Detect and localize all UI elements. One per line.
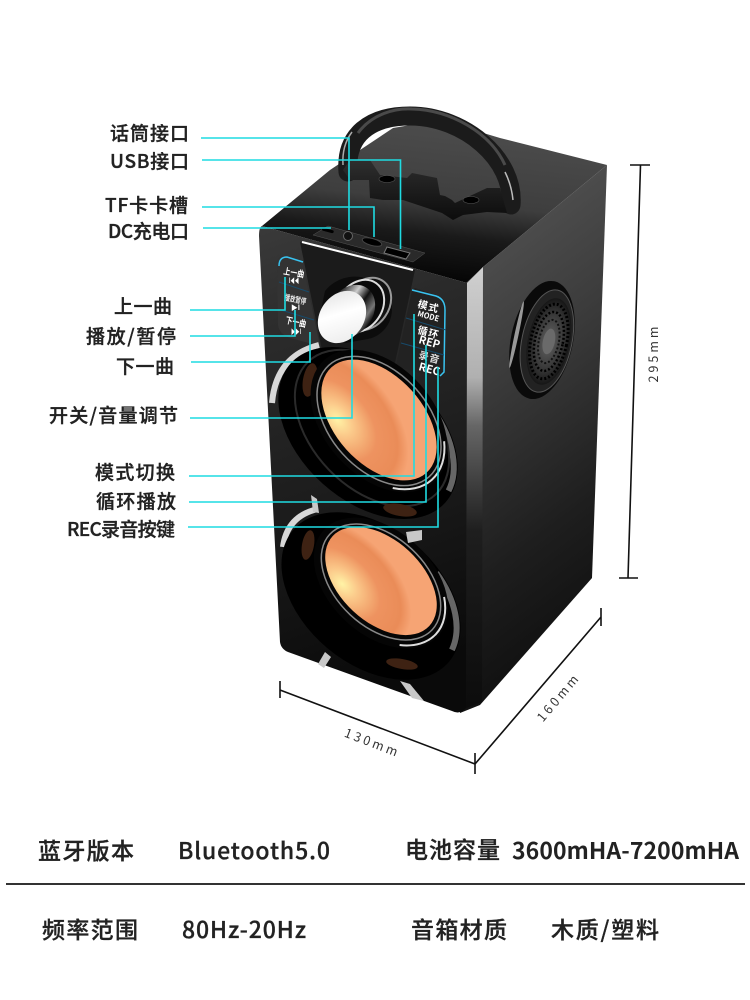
right button panel: REC bbox=[417, 358, 442, 379]
spec: 木质/塑料: 木质/塑料 bbox=[551, 911, 659, 945]
label: TF卡卡槽: TF卡卡槽 bbox=[105, 191, 188, 218]
label: 开关/音量调节: 开关/音量调节 bbox=[49, 401, 178, 428]
left button panel bbox=[277, 256, 320, 346]
spec: 80Hz-20Hz: 80Hz-20Hz bbox=[182, 911, 306, 945]
top face of speaker bbox=[262, 120, 607, 283]
front face bbox=[259, 226, 467, 712]
label: 上一曲: 上一曲 bbox=[114, 292, 172, 319]
right button panel bbox=[396, 288, 446, 379]
label: 话筒接口: 话筒接口 bbox=[110, 119, 189, 146]
side face bbox=[460, 165, 607, 713]
label: 播放/暂停: 播放/暂停 bbox=[86, 322, 176, 349]
centre knob panel bbox=[300, 242, 415, 372]
dimension: depth 160mm bbox=[475, 608, 601, 764]
handle mount bbox=[343, 160, 507, 220]
spec: 电池容量: 电池容量 bbox=[405, 831, 500, 865]
right button panel: 循环 bbox=[416, 321, 440, 341]
left button panel: ▶▶I bbox=[291, 327, 301, 337]
lower woofer bbox=[249, 478, 493, 714]
label: REC录音按键: REC录音按键 bbox=[67, 515, 175, 542]
callout lines bbox=[188, 138, 438, 527]
left button panel: I◀◀ bbox=[289, 276, 299, 286]
left button panel: 上一曲 bbox=[282, 264, 305, 281]
spec divider bbox=[6, 883, 745, 885]
dimension: height 295mm bbox=[619, 165, 662, 578]
left button panel: 播放暂停 bbox=[283, 292, 307, 308]
speaker product bbox=[245, 109, 607, 714]
upper woofer bbox=[245, 313, 491, 553]
spec: 频率范围: 频率范围 bbox=[42, 911, 138, 945]
dimension: width 130mm bbox=[280, 681, 475, 774]
label: 下一曲: 下一曲 bbox=[116, 352, 174, 379]
dimension: height 295mm: 295mm bbox=[643, 324, 662, 382]
right button panel: 模式 bbox=[416, 295, 440, 315]
left button panel: 下一曲 bbox=[284, 313, 308, 330]
right button panel: 录音 bbox=[417, 346, 441, 366]
dimension: depth 160mm: 160mm bbox=[532, 668, 584, 725]
spec table bbox=[6, 831, 745, 945]
dimension: width 130mm: 130mm bbox=[342, 722, 404, 761]
port strip bbox=[313, 226, 425, 262]
volume knob bbox=[308, 268, 401, 353]
silver corner strip bbox=[466, 267, 483, 708]
callout labels bbox=[49, 119, 189, 542]
side tweeter bbox=[499, 275, 585, 405]
label: DC充电口: DC充电口 bbox=[108, 217, 189, 244]
right button panel: REP bbox=[417, 331, 442, 352]
label: 循环播放: 循环播放 bbox=[96, 487, 176, 514]
handle bbox=[343, 109, 513, 205]
label: USB接口: USB接口 bbox=[110, 147, 189, 174]
silver tabs bbox=[311, 495, 424, 701]
left button panel: ▶I bbox=[291, 303, 300, 313]
spec: Bluetooth5.0: Bluetooth5.0 bbox=[178, 832, 330, 866]
panel highlight bbox=[302, 242, 413, 270]
label: 模式切换: 模式切换 bbox=[95, 458, 175, 485]
spec: battery capacity value: 3600mHA-7200mHA bbox=[512, 832, 739, 866]
right button panel: MODE bbox=[416, 308, 440, 325]
spec: 蓝牙版本: 蓝牙版本 bbox=[38, 832, 134, 866]
spec: 音箱材质: 音箱材质 bbox=[411, 911, 507, 945]
